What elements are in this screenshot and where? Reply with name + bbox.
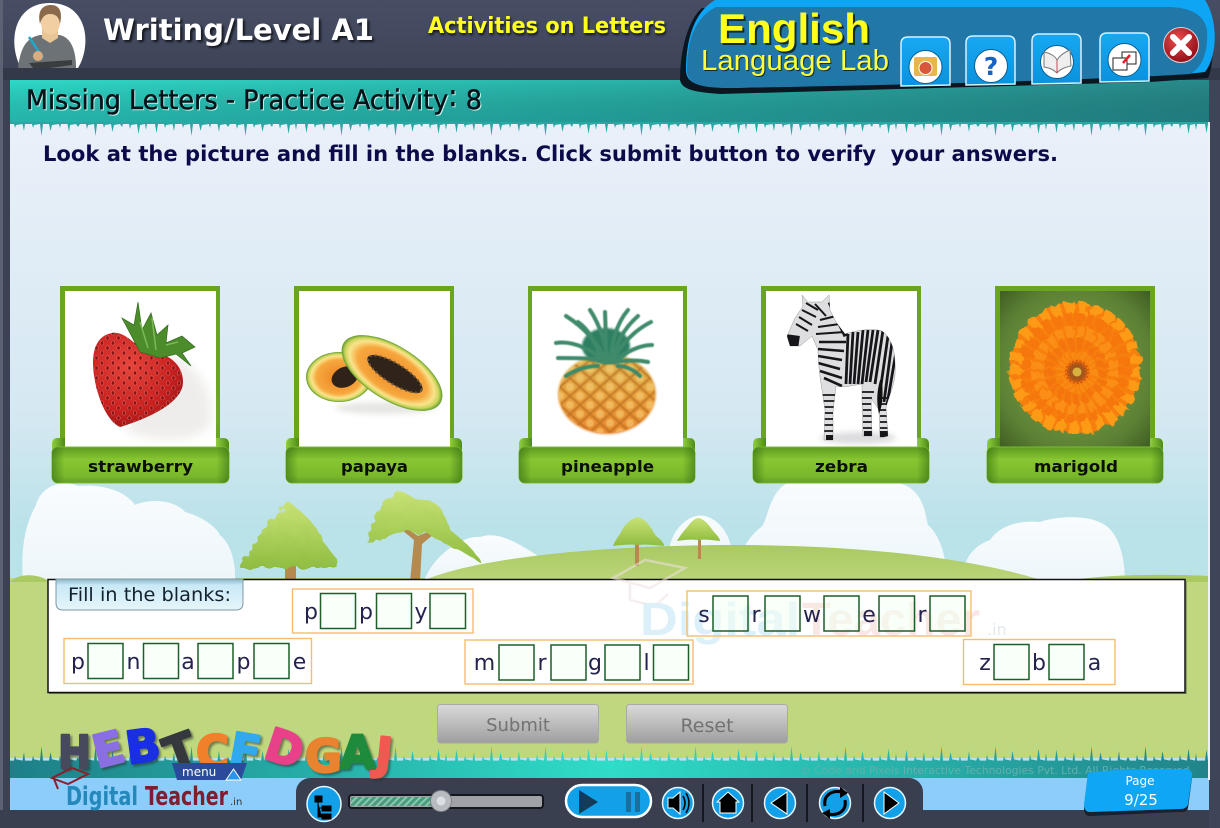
- button: Reset: [626, 704, 788, 743]
- word: marigold blanks: r: [537, 651, 547, 676]
- tab: menu: menu: [182, 765, 216, 779]
- tree 1: [240, 503, 338, 585]
- icon: student avatar: [14, 3, 85, 68]
- panel: fill in the blanks: [48, 560, 1186, 694]
- picture: marigold: [1000, 291, 1150, 447]
- card: zebra: [753, 286, 929, 483]
- logo: coloured letters: G: [305, 730, 342, 783]
- left and right ground rise: [10, 575, 1209, 582]
- play and pause control: [566, 785, 651, 817]
- progress slider: [349, 790, 543, 812]
- logo: coloured letters: J: [370, 727, 395, 781]
- card: marigold: [987, 286, 1163, 483]
- word: strawberry blanks: s: [698, 603, 710, 628]
- page badge: 9/25: [1124, 791, 1158, 809]
- heading: Activities on Letters: Activities on Letters: [428, 14, 666, 39]
- word: pineapple blanks: a: [181, 650, 195, 675]
- watermark: Digital Teacher: Digital: [640, 593, 800, 645]
- word: marigold blanks: [465, 640, 693, 684]
- tree 2: [367, 490, 480, 582]
- heading: Missing Letters - Practice Activity: Missing Letters - Practice Activity: [26, 85, 474, 116]
- icon: speaker: [662, 788, 694, 818]
- button: Submit: [438, 704, 598, 743]
- title: Language Lab: Language Lab: [701, 45, 889, 77]
- logo: coloured letters: [58, 717, 395, 783]
- page badge: [1084, 769, 1192, 816]
- word: zebra blanks: z: [979, 651, 991, 676]
- word: strawberry blanks: r: [751, 603, 761, 628]
- logo: coloured letters: F: [226, 722, 265, 780]
- divider lines: [703, 784, 863, 822]
- bottom grass strip: [10, 746, 1208, 778]
- copyright text: © Code and Pixels Interactive Technologies Pvt. Ltd. All Rights Reserved.: [800, 765, 1193, 777]
- picture: strawberry: [90, 302, 211, 440]
- label: zebra: zebra: [815, 457, 868, 476]
- word: marigold blanks: g: [588, 651, 602, 676]
- word: marigold blanks: l: [643, 651, 650, 676]
- watermark: Digital Teacher: Teacher: [802, 593, 980, 645]
- card: strawberry: [52, 286, 229, 483]
- watermark: Digital Teacher: [613, 560, 1007, 645]
- word: zebra blanks: b: [1032, 651, 1046, 676]
- logo: coloured letters: C: [196, 726, 229, 779]
- logo: coloured letters: B: [122, 718, 164, 775]
- card: papaya: [286, 286, 462, 483]
- logo: Digital Teacher: .in: [230, 797, 242, 808]
- icon: refresh: [820, 787, 850, 819]
- logo: Digital Teacher: Teacher: [145, 782, 228, 812]
- tab: Fill in the blanks: Fill in the blanks:: [68, 584, 231, 606]
- page badge: Page: [1125, 774, 1155, 788]
- watermark: Digital Teacher: .in: [987, 620, 1007, 639]
- word: strawberry blanks: w: [803, 603, 821, 628]
- label: strawberry: strawberry: [88, 457, 194, 476]
- card: pineapple: [519, 286, 695, 483]
- icon: home: [712, 788, 744, 818]
- label: papaya: papaya: [341, 457, 408, 476]
- logo: coloured letters: E: [87, 720, 130, 779]
- clouds: [22, 478, 1125, 582]
- picture: pineapple: [555, 310, 660, 435]
- icon: contents tree: [307, 786, 341, 822]
- button: open book: [1032, 34, 1081, 84]
- logo: Digital Teacher: [52, 768, 242, 812]
- button: help: ?: [984, 52, 998, 81]
- heading: Missing Letters - Practice Activity: :: [448, 79, 458, 114]
- word: pineapple blanks: [64, 638, 312, 684]
- logo: coloured letters: H: [58, 726, 91, 779]
- tree 3: [613, 517, 664, 566]
- title: English: English: [718, 5, 870, 52]
- word: pineapple blanks: e: [293, 650, 306, 675]
- heading: Missing Letters - Practice Activity: 8: [458, 85, 482, 116]
- logo: Digital Teacher: Digital: [66, 782, 138, 812]
- word: papaya blanks: [292, 589, 473, 633]
- picture: zebra: [785, 295, 896, 444]
- word: zebra blanks: [964, 640, 1115, 684]
- label: pineapple: pineapple: [561, 457, 654, 476]
- logo: coloured letters: T: [157, 721, 204, 781]
- header band: teal title strip: [10, 80, 1209, 137]
- word: marigold blanks: m: [474, 651, 495, 676]
- picture: papaya: [306, 320, 455, 426]
- button: resize window: [1100, 33, 1149, 82]
- word: papaya blanks: p: [359, 600, 373, 625]
- button: help: [966, 36, 1015, 85]
- tree 4: [677, 518, 720, 559]
- button: Submit: Submit: [486, 715, 550, 736]
- word: strawberry blanks: e: [862, 603, 876, 628]
- word: strawberry blanks: r: [917, 603, 927, 628]
- hill: [420, 545, 1047, 582]
- logo: coloured letters: A: [340, 726, 375, 779]
- word: strawberry blanks: [687, 591, 971, 636]
- instruction text: Look at the picture and fill in the blanks. Click submit button to verify your answers.: [43, 142, 1058, 167]
- button: close: [1164, 28, 1198, 62]
- logo: coloured letters: D: [259, 717, 310, 779]
- word: pineapple blanks: n: [127, 650, 140, 675]
- button: bookmarks: [901, 37, 950, 86]
- panel: activity stage background: [10, 120, 1209, 780]
- tab: Fill in the blanks: [56, 579, 243, 610]
- label: marigold: marigold: [1034, 457, 1118, 476]
- word: pineapple blanks: p: [237, 650, 250, 675]
- word: zebra blanks: a: [1088, 651, 1101, 676]
- icon: back arrow: [764, 788, 796, 818]
- heading: Writing / Level A1: Writing/Level A1: [103, 13, 374, 47]
- button: Reset: Reset: [680, 715, 734, 737]
- word: papaya blanks: p: [304, 600, 318, 625]
- word: papaya blanks: y: [414, 600, 428, 625]
- panel: English Language Lab header: [680, 0, 1215, 94]
- word: pineapple blanks: p: [71, 650, 85, 675]
- icon: next arrow: [874, 788, 906, 818]
- tab: menu: [172, 763, 247, 780]
